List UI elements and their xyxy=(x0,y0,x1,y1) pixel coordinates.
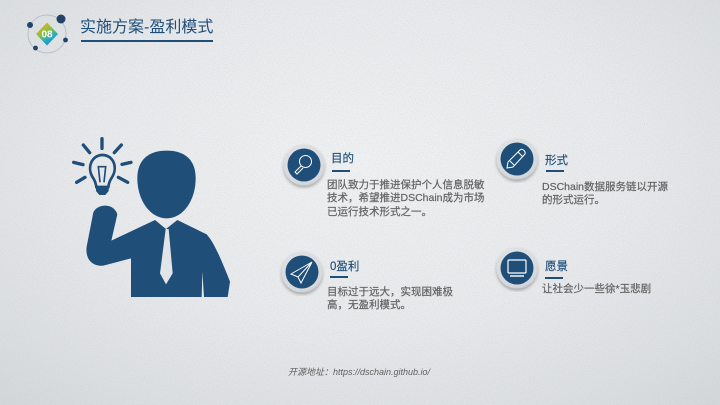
text block: 团队致力于推进保护个人信息脱敏 xyxy=(327,179,484,191)
title underline xyxy=(81,40,213,42)
text block: 已运行技术形式之一。 xyxy=(327,206,432,218)
text block: DSChain数据服务链以开源 xyxy=(542,181,668,193)
panel: 0盈利 xyxy=(280,252,453,311)
text block xyxy=(327,286,453,311)
person body xyxy=(86,206,230,297)
icon: monitor xyxy=(494,248,540,292)
heading underline xyxy=(546,170,564,172)
header logo: 08 badge: 08 xyxy=(41,30,53,40)
panel: 愿景 xyxy=(494,248,651,295)
panel: 目的 xyxy=(282,144,485,218)
text block: 目标过于远大，实现困难极 xyxy=(327,286,453,298)
text block xyxy=(542,181,668,206)
person tie xyxy=(160,229,173,284)
title: 实施方案-盈利模式 xyxy=(80,19,213,36)
text block: 高，无盈利模式。 xyxy=(327,299,411,311)
heading: 愿景 xyxy=(545,261,568,273)
icon: paper plane xyxy=(280,252,324,296)
text block xyxy=(327,179,485,218)
heading: 目的 xyxy=(331,153,354,165)
header logo: 08 badge xyxy=(27,14,68,54)
heading: 形式 xyxy=(545,155,568,167)
text block: 的形式运行。 xyxy=(542,194,605,206)
text block: 让社会少一些徐*玉悲剧 xyxy=(542,283,651,295)
text block: 技术，希望推进DSChain成为市场 xyxy=(327,192,485,204)
icon: pencil xyxy=(494,138,540,183)
heading underline xyxy=(545,277,563,279)
heading: 0盈利 xyxy=(330,261,359,273)
illustration: businessman with light bulb xyxy=(72,137,230,297)
heading underline xyxy=(332,170,350,172)
footer source link: 开源地址：https://dschain.github.io/ xyxy=(288,367,430,377)
person head xyxy=(137,151,196,218)
heading underline xyxy=(330,276,348,278)
panel: 形式 xyxy=(494,138,668,206)
icon: magnifier xyxy=(282,144,326,190)
icon: light bulb xyxy=(74,139,131,195)
